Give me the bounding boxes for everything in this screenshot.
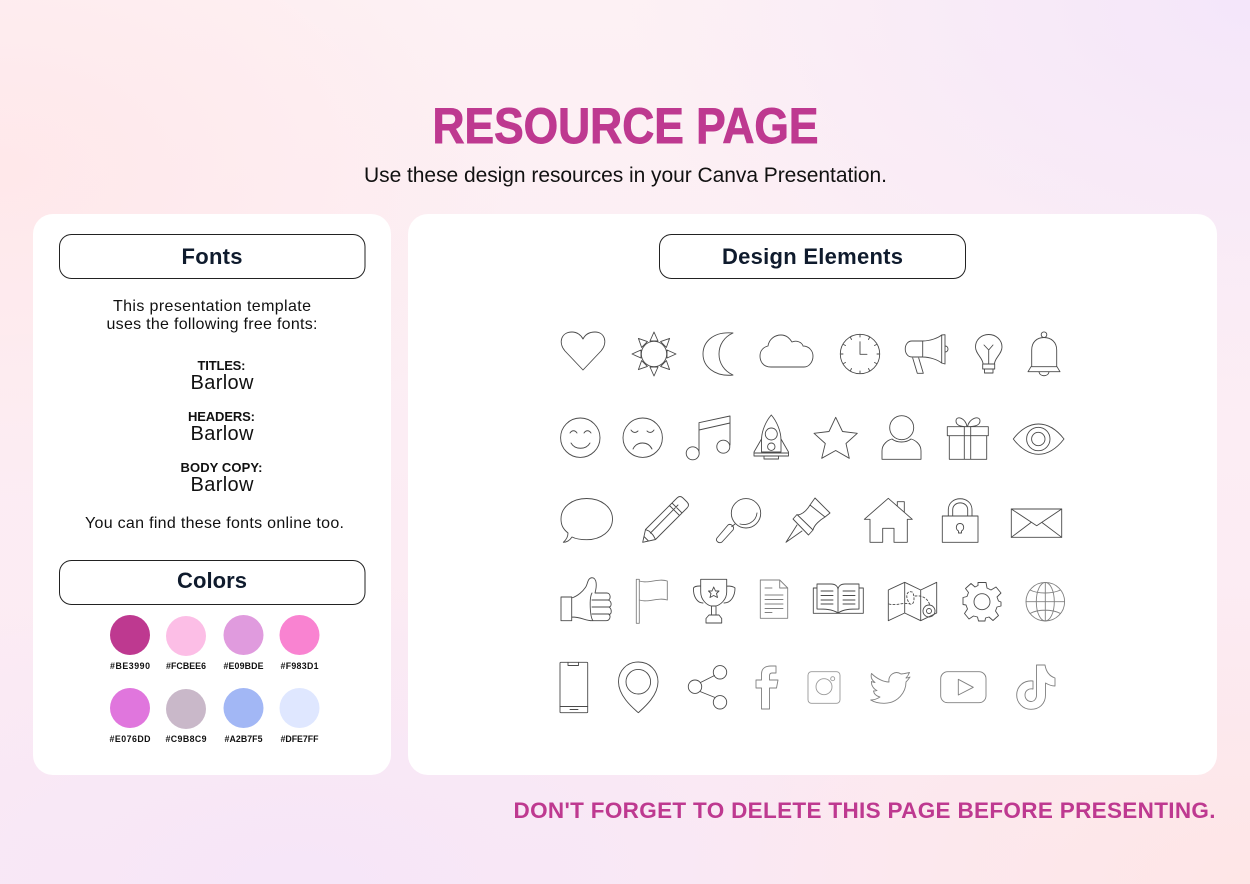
icon: instagram (808, 672, 840, 703)
color swatches: #A2B7F5 (224, 734, 263, 744)
color swatches: #E076DD (110, 734, 150, 744)
icon: globe (1026, 582, 1065, 621)
text: body copy font: BODY COPY: (180, 460, 262, 475)
text: titles font: TITLES: (198, 358, 246, 373)
icon: gear (963, 582, 1001, 621)
text: headers font: HEADERS: (188, 409, 255, 424)
icon: gift (947, 418, 988, 459)
icon: house (864, 498, 912, 542)
icon: megaphone (905, 335, 948, 373)
icon: sad face (623, 418, 662, 457)
icon: folded map (888, 582, 937, 621)
icon: cloud (760, 335, 813, 367)
icon: rocket (754, 415, 788, 459)
color swatches: #C9B8C9 (166, 734, 207, 744)
icon: magnifying glass (716, 499, 761, 543)
icon: youtube (941, 672, 986, 703)
color swatches: #E09BDE (224, 661, 264, 671)
icon: star (814, 417, 857, 458)
icon: padlock (942, 499, 978, 542)
subtitle: Use these design resources in your Canva Presentation. (364, 164, 887, 187)
text: fonts intro: This presentation template (113, 298, 311, 315)
icon: open book (813, 584, 863, 613)
color swatches: #DFE7FF (280, 734, 319, 744)
icon: map pin (618, 662, 658, 713)
text: headers font (188, 409, 255, 445)
text: headers font: Barlow (190, 423, 254, 445)
icon: music notes (686, 416, 730, 460)
panel: fonts and colors (33, 214, 391, 775)
icon: envelope (1011, 509, 1062, 537)
heading: design elements (660, 234, 966, 278)
text: body copy font: Barlow (190, 474, 254, 496)
title: RESOURCE PAGE (432, 98, 818, 154)
icon: bell (1028, 332, 1060, 376)
icon: heart (561, 332, 605, 370)
icon: facebook (756, 666, 778, 709)
color swatches (110, 615, 320, 744)
heading: colors: Colors (177, 568, 247, 593)
icon: speech bubble (561, 498, 612, 542)
icon: tiktok (1017, 665, 1055, 709)
heading: colors (60, 560, 365, 604)
color swatches: #F983D1 (280, 661, 319, 671)
icon: thumbs up (561, 578, 611, 621)
text: body copy font (180, 460, 262, 496)
text: fonts intro: uses the following free fonts: (106, 316, 318, 333)
footer reminder: DON'T FORGET TO DELETE THIS PAGE BEFORE PRESENTING. (514, 798, 1216, 823)
text: titles font (190, 358, 254, 394)
icon: document (760, 580, 788, 618)
icon: light bulb (976, 334, 1002, 373)
color swatches: #BE3990 (110, 661, 150, 671)
icon: flag (636, 579, 667, 623)
icon: clock (840, 334, 880, 374)
text: titles font: Barlow (190, 372, 254, 394)
icon: trophy (693, 579, 735, 623)
icon: moon (703, 333, 733, 375)
icon: push pin (786, 498, 830, 542)
icon: sun (632, 332, 676, 376)
text: fonts note: You can find these fonts online too. (85, 515, 344, 532)
heading: fonts: Fonts (182, 244, 242, 269)
heading: design elements: Design Elements (722, 244, 903, 269)
icon: twitter (871, 672, 910, 703)
icon: eye (1013, 424, 1064, 454)
color swatches: #FCBEE6 (166, 661, 206, 671)
icon: pencil (643, 496, 688, 542)
panel: design elements (408, 214, 1217, 775)
icon: share (688, 666, 727, 709)
icon: smiling face (561, 418, 600, 457)
icon: smartphone (560, 662, 588, 713)
icon: person (882, 416, 921, 459)
heading: fonts (60, 234, 365, 278)
